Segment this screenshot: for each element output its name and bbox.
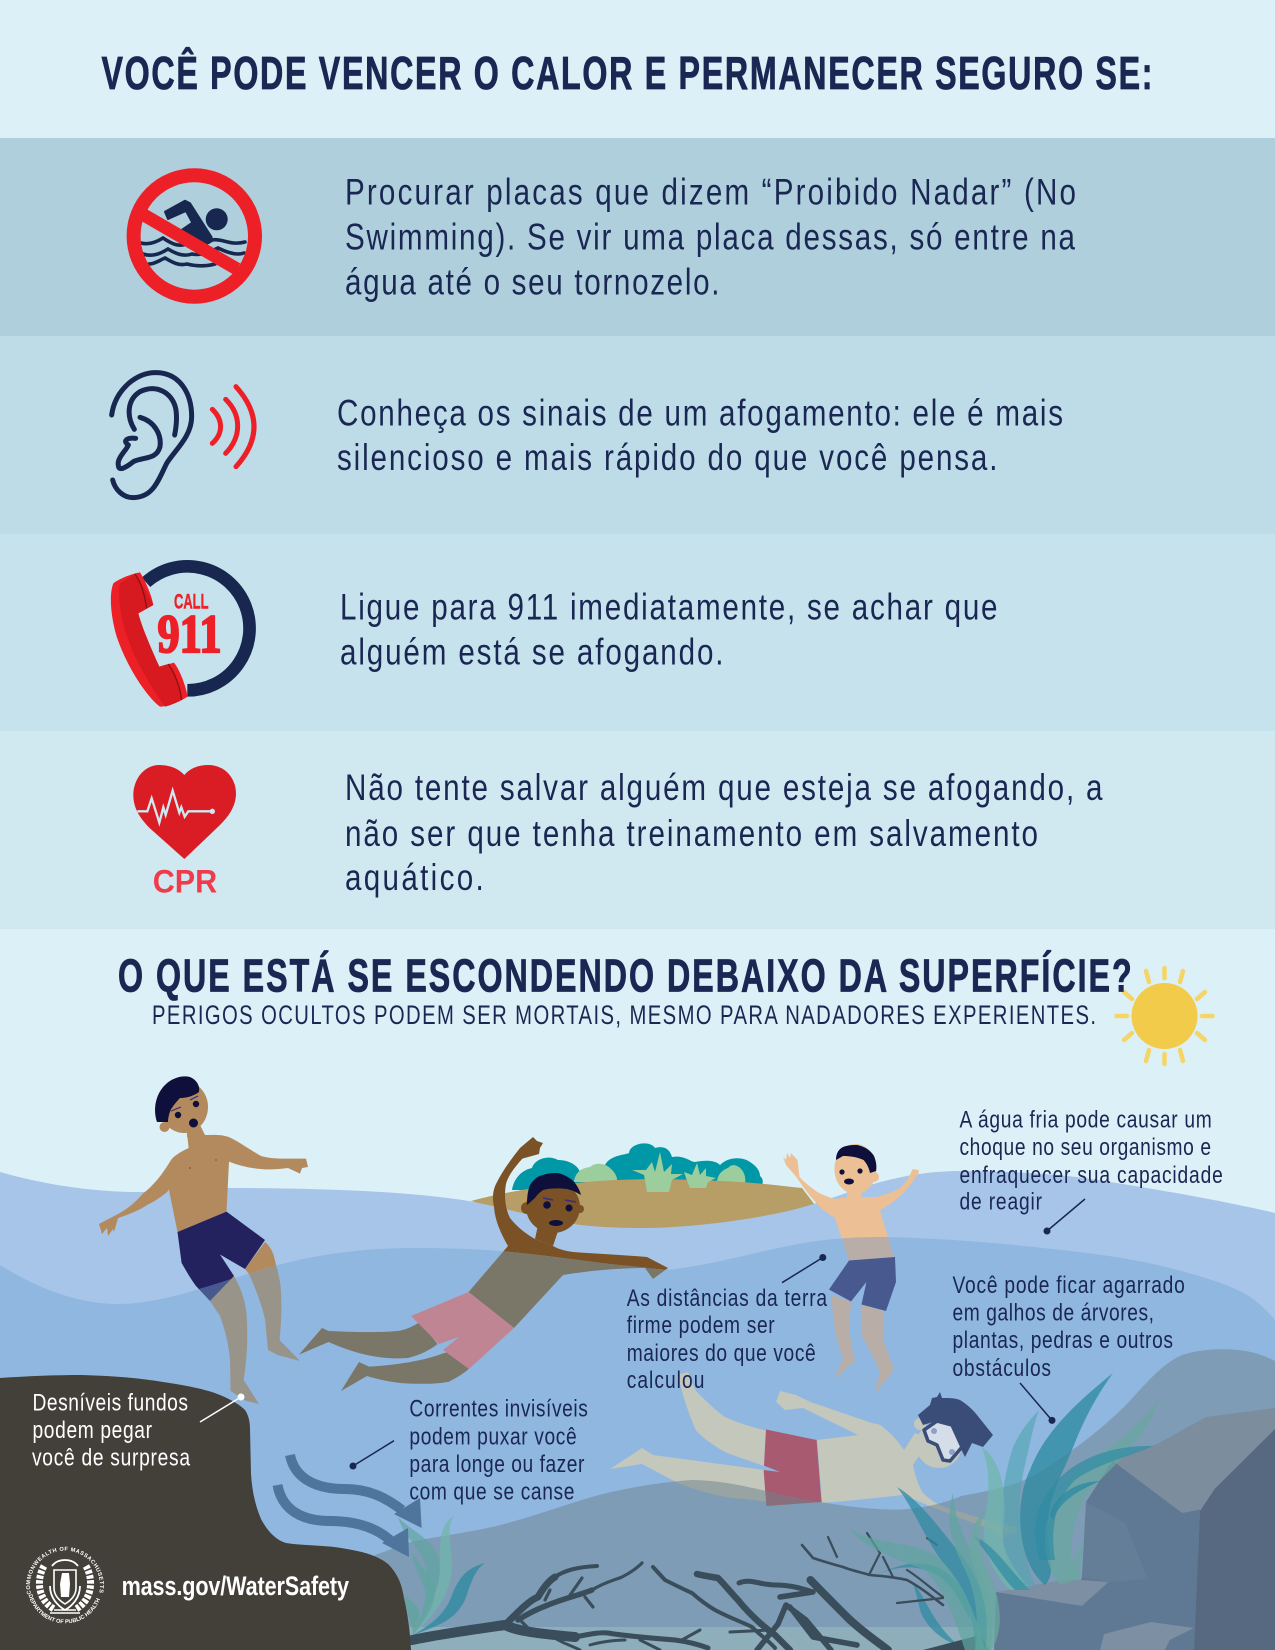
- website link: mass.gov/WaterSafety: [122, 1572, 349, 1602]
- text block: rescue training: aquático.: [345, 858, 484, 899]
- swimmer: snorkeler: [610, 1372, 1016, 1540]
- branch base on seabed: [923, 1635, 990, 1650]
- icon: sun: [1116, 968, 1212, 1064]
- callout: cold water: A água fria pode causar um: [960, 1106, 1212, 1133]
- callout: distances to land: firme podem ser: [627, 1311, 775, 1339]
- text block: no swimming signs: Procurar placas que dizem “Proibido Nadar” (No: [345, 173, 1076, 213]
- text block: no swimming signs: água até o seu tornozelo.: [345, 263, 719, 303]
- callout: cold water: de reagir: [960, 1188, 1042, 1215]
- panel: do not attempt rescue: [0, 731, 1275, 929]
- callout: cold water: [960, 1106, 1223, 1234]
- arrows: invisible currents: [278, 1455, 422, 1557]
- seal: department of public health: DEPARTMENT OF PUBLIC HEALTH: [28, 1594, 100, 1624]
- icon: no swimming sign: [134, 175, 255, 297]
- icon: ear with sound waves: [112, 373, 254, 498]
- callout: cold water: choque no seu organismo e: [960, 1133, 1211, 1161]
- swimmer: boy reaching with raised arm: [299, 1137, 668, 1391]
- callout: deep drop-offs: [32, 1389, 244, 1471]
- dark ground: drop-off: [0, 1375, 411, 1650]
- heading: hidden dangers: O QUE ESTÁ SE ESCONDENDO DEBAIXO DA SUPERFÍCIE?: [118, 951, 1132, 1002]
- callout: distances to land: calculou: [627, 1366, 704, 1394]
- fallen branches: [412, 1533, 943, 1650]
- text block: signs of drowning: [337, 394, 1063, 479]
- seal: department of public health: COMMONWEALTH OF MASSACHUSETTS: [26, 1546, 104, 1594]
- callout: invisible currents: Correntes invisíveis: [409, 1395, 588, 1422]
- callout: deep drop-offs: Desníveis fundos: [32, 1389, 188, 1416]
- text block: no swimming signs: Swimming). Se vir uma placa dessas, só entre na: [345, 217, 1075, 258]
- text block: rescue training: não ser que tenha treinamento em salvamento: [345, 814, 1038, 855]
- icon: heart with pulse: [133, 765, 236, 859]
- text block: signs of drowning: silencioso e mais rápido do que você pensa.: [337, 438, 997, 479]
- callout: snagged on obstacles: [952, 1271, 1185, 1424]
- seaweed: right cluster: [880, 1373, 1160, 1645]
- water: shallow layer: [0, 1171, 1275, 1650]
- seaweed: front leaves: [848, 1487, 1000, 1650]
- callout: deep drop-offs: você de surpresa: [32, 1444, 191, 1471]
- text block: call 911: alguém está se afogando.: [340, 632, 724, 673]
- seal: department of public health: [26, 1546, 104, 1624]
- text block: no swimming signs: [345, 173, 1076, 303]
- icon label: call: CALL: [174, 590, 209, 613]
- title: VOCÊ PODE VENCER O CALOR E PERMANECER SEGURO SE:: [102, 48, 1152, 99]
- swimmer: boy with arms up in the distance: [783, 1144, 919, 1393]
- callout: deep drop-offs: podem pegar: [32, 1416, 152, 1444]
- icon label: 911: 911: [158, 604, 222, 664]
- callout: distances to land: maiores do que você: [627, 1339, 816, 1367]
- callout: distances to land: [627, 1254, 828, 1394]
- callout: cold water: enfraquecer sua capacidade: [960, 1161, 1223, 1189]
- text block: call 911: Ligue para 911 imediatamente, se achar que: [340, 587, 998, 628]
- callout: snagged on obstacles: Você pode ficar agarrado: [952, 1271, 1185, 1299]
- text block: signs of drowning: Conheça os sinais de um afogamento: ele é mais: [337, 394, 1063, 435]
- island with bushes: [471, 1143, 815, 1232]
- subheading: PERIGOS OCULTOS PODEM SER MORTAIS, MESMO PARA NADADORES EXPERIENTES.: [152, 1000, 1096, 1031]
- icon label: CPR: CPR: [153, 864, 217, 900]
- seaweed: left cluster: [398, 1515, 485, 1635]
- text block: rescue training: [345, 768, 1103, 899]
- text block: call 911: [340, 587, 998, 673]
- callout: invisible currents: para longe ou fazer: [409, 1450, 584, 1478]
- seabed: [375, 1349, 1275, 1650]
- panel: no swimming: [0, 138, 1275, 336]
- callout: distances to land: As distâncias da terra: [627, 1284, 828, 1312]
- callout: snagged on obstacles: obstáculos: [952, 1354, 1051, 1382]
- panel: call 911: [0, 534, 1275, 731]
- callout: invisible currents: com que se canse: [409, 1477, 574, 1505]
- callout: snagged on obstacles: plantas, pedras e outros: [952, 1326, 1173, 1353]
- water: deep layer: [0, 1237, 1275, 1650]
- rocks: [994, 1408, 1275, 1650]
- callout: invisible currents: [350, 1395, 588, 1505]
- callout: invisible currents: podem puxar você: [409, 1422, 577, 1450]
- text block: rescue training: Não tente salvar alguém que esteja se afogando, a: [345, 768, 1103, 809]
- icon: phone and call 911: [111, 566, 250, 707]
- seabed lighter strip: [410, 1627, 1010, 1650]
- callout: snagged on obstacles: em galhos de árvores,: [952, 1299, 1154, 1326]
- swimmer: surprised boy falling off drop-off: [99, 1076, 308, 1404]
- panel: signs of drowning: [0, 336, 1275, 534]
